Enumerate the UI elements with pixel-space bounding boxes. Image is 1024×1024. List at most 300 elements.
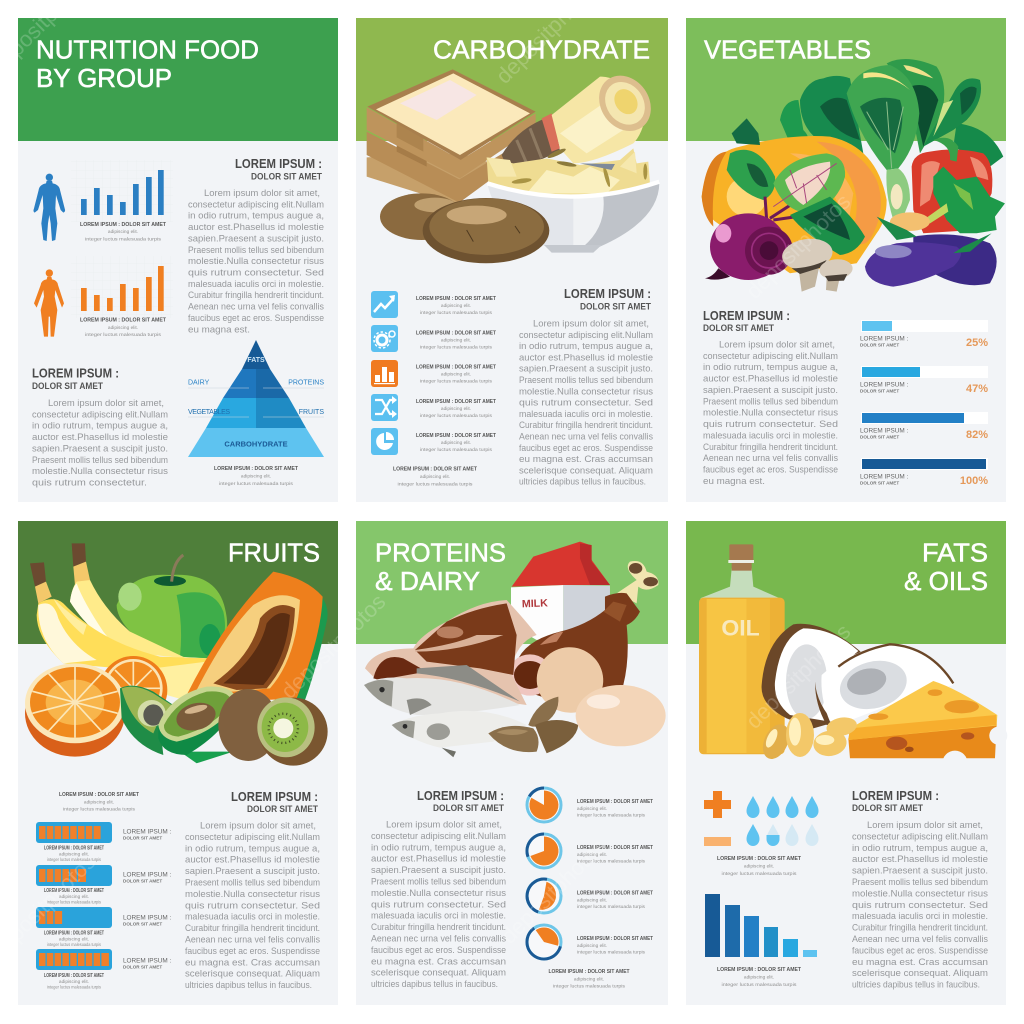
green floret — [923, 167, 1005, 233]
text block: vegetables: Praesent mollis tellus sed bibendum — [703, 395, 838, 406]
meter: row 2: LOREM IPSUM : — [123, 872, 172, 878]
text block: vegetables — [703, 338, 838, 486]
caption — [80, 318, 167, 338]
caption: integer luctus malesuada turpis — [85, 236, 162, 242]
header band: fats — [686, 521, 1006, 644]
header band: vegetables — [686, 18, 1006, 141]
captions: icon rows: integer luctus malesuada turpis — [420, 447, 493, 453]
heading: carbohydrate: LOREM IPSUM : — [564, 287, 651, 301]
captions: pie rows: LOREM IPSUM : DOLOR SIT AMET — [577, 799, 654, 805]
text block: fruits: Aenean nec urna vel felis convallis — [185, 934, 320, 944]
caption: pyramid: integer luctus malesuada turpis — [219, 481, 294, 487]
text block: fruits: in odio rutrum, tempus augue a, — [185, 842, 320, 853]
oil bottle: OIL — [721, 616, 760, 641]
caption: drops — [717, 856, 802, 877]
title: carbohydrate: CARBOHYDRATE — [433, 34, 650, 64]
text block: carbohydrate — [519, 318, 653, 487]
gauge: pie 3 — [527, 879, 561, 913]
text block: carbohydrate: Curabitur fringilla hendrerit tincidunt. — [519, 419, 653, 430]
icon: shuffle — [371, 394, 398, 421]
illustration: vegetables — [702, 59, 1005, 292]
icon: female figure — [34, 269, 64, 337]
milk carton: MILK — [522, 597, 548, 610]
text block: fats: malesuada iaculis orci in molestie. — [852, 910, 988, 921]
text block: proteins: Praesent mollis tellus sed bibendum — [371, 876, 506, 886]
meter: row 3: integer luctus malesuada turpis — [47, 942, 101, 948]
peanuts — [758, 713, 858, 763]
bar chart: descending — [705, 894, 817, 957]
text block: left column: Lorem ipsum dolor sit amet, — [48, 397, 164, 408]
header band: proteins — [356, 521, 668, 644]
icon: bar chart — [371, 360, 398, 387]
oil bottle — [699, 544, 785, 754]
caption — [80, 222, 167, 242]
heading: fruits: DOLOR SIT AMET — [247, 804, 318, 814]
illustration: bread, root, pasta, potatoes — [367, 66, 661, 263]
text block: carbohydrate: ultricies dapibus tellus in faucibus. — [519, 476, 646, 487]
captions: pie rows: adipiscing elit. — [577, 806, 607, 812]
text block: vegetables: Aenean nec urna vel felis convallis — [703, 452, 838, 463]
text block: vegetables: auctor est.Phasellus id molestie — [703, 373, 838, 384]
text block: carbohydrate: auctor est.Phasellus id molestie — [519, 351, 653, 362]
oranges — [25, 656, 167, 757]
watermark: depositphotos — [741, 189, 855, 304]
text block: carbohydrate: Lorem ipsum dolor sit amet, — [533, 318, 649, 328]
caption: pyramid: LOREM IPSUM : DOLOR SIT AMET — [214, 466, 299, 472]
header band: fruits — [18, 521, 338, 644]
text block: fats: eu magna est. Cras accumsan — [852, 956, 988, 967]
bread stack — [367, 69, 536, 204]
captions: pie rows: LOREM IPSUM : DOLOR SIT AMET — [577, 845, 654, 851]
captions: icon rows: adipiscing elit. — [420, 474, 450, 480]
heading: fruits — [231, 790, 318, 814]
panel: vegetables — [686, 18, 1006, 502]
text block: fats: consectetur adipiscing elit.Nullam — [852, 830, 988, 841]
icon: male figure — [33, 174, 65, 241]
leafy greens back — [780, 59, 1003, 167]
text block: left column: auctor est.Phasellus id molestie — [32, 431, 168, 442]
orange bars — [81, 266, 164, 311]
root vegetable — [502, 66, 661, 167]
beet leaves — [727, 118, 865, 255]
captions: icon rows: LOREM IPSUM : DOLOR SIT AMET — [416, 296, 497, 302]
text block: right column: in odio rutrum, tempus augue a, — [188, 210, 324, 221]
text block: fats: ultricies dapibus tellus in faucibus. — [852, 979, 980, 990]
title: fats and oils: FATS — [922, 538, 988, 568]
text block: fruits: Curabitur fringilla hendrerit tincidunt. — [185, 922, 320, 933]
meter: row 4: DOLOR SIT AMET — [123, 964, 162, 970]
text block: right column: Curabitur fringilla hendrerit tincidunt. — [188, 289, 324, 300]
meter: row 1: LOREM IPSUM : DOLOR SIT AMET — [44, 846, 105, 852]
panel: nutrition food by group — [18, 18, 338, 502]
panel: fats and oils — [686, 521, 1007, 1005]
caption: drops: LOREM IPSUM : DOLOR SIT AMET — [717, 856, 802, 862]
captions: icon rows: adipiscing elit. — [441, 303, 471, 309]
bar: 47%: LOREM IPSUM : — [860, 382, 909, 388]
text block: vegetables: in odio rutrum, tempus augue a, — [703, 361, 838, 372]
chart: food pyramid: CARBOHYDRATE — [224, 440, 288, 448]
watermark: depositphotos — [276, 589, 390, 704]
chart: female body with orange bars — [34, 256, 173, 338]
caption: drops: integer luctus malesuada turpis — [722, 871, 797, 877]
text block: carbohydrate: consectetur adipiscing elit.Nullam — [519, 329, 653, 340]
heading: left column: LOREM IPSUM : — [32, 366, 119, 380]
text block: proteins: ultricies dapibus tellus in faucibus. — [371, 978, 498, 989]
pumpkin — [702, 136, 887, 273]
title: proteins and dairy: PROTEINS — [375, 538, 506, 568]
caption: LOREM IPSUM : DOLOR SIT AMET — [80, 222, 167, 228]
title: fats and oils — [904, 538, 988, 596]
panel: proteins and dairy — [356, 521, 668, 1005]
meter: row 4 — [36, 949, 172, 990]
heading: carbohydrate — [564, 287, 651, 312]
chicken leg — [508, 561, 658, 698]
bar: 82%: LOREM IPSUM : — [860, 428, 909, 434]
watermark: depositphotos — [496, 834, 610, 949]
papaya — [187, 572, 328, 702]
meter: row 4: LOREM IPSUM : — [123, 958, 172, 964]
meter: row 1: integer luctus malesuada turpis — [47, 857, 101, 863]
text block: proteins: Lorem ipsum dolor sit amet, — [386, 818, 502, 830]
captions: pie rows: adipiscing elit. — [577, 852, 607, 858]
bar: 47%: DOLOR SIT AMET — [860, 388, 899, 394]
heading: vegetables: DOLOR SIT AMET — [703, 323, 774, 333]
text block: vegetables: malesuada iaculis orci in molestie. — [703, 429, 838, 440]
text block: left column: molestie.Nulla consectetur risus — [32, 465, 168, 476]
bar: 100%: LOREM IPSUM : — [860, 474, 909, 480]
heading: fruits: LOREM IPSUM : — [231, 790, 318, 804]
icon: plus — [704, 791, 731, 818]
text block: vegetables: molestie.Nulla consectetur risus — [703, 407, 838, 418]
clams — [488, 697, 578, 753]
captions: icon rows: LOREM IPSUM : DOLOR SIT AMET — [393, 466, 478, 472]
text block: left column: in odio rutrum, tempus augue a, — [32, 420, 168, 431]
kiwis — [218, 689, 328, 766]
header band: carbohydrate — [356, 18, 668, 141]
text block: right column: quis rutrum consectetur. Sed — [188, 266, 324, 278]
heading: right column — [235, 157, 322, 182]
text block: right column: molestie.Nulla consectetur risus — [188, 255, 324, 266]
text block: left column: quis rutrum consectetur. — [32, 476, 147, 488]
captions: icon rows: LOREM IPSUM : DOLOR SIT AMET — [416, 365, 497, 371]
text block: proteins — [371, 818, 506, 989]
captions: icon rows: adipiscing elit. — [441, 440, 471, 446]
bar: 47% — [860, 366, 988, 395]
avocados — [120, 686, 237, 763]
title: vegetables: VEGETABLES — [704, 34, 871, 64]
chart: food pyramid: FATS — [247, 357, 265, 364]
captions: pie rows — [548, 799, 654, 990]
caption: integer luctus malesuada turpis — [85, 332, 162, 338]
bar: 100%: DOLOR SIT AMET — [860, 480, 899, 486]
text block: carbohydrate: molestie.Nulla consectetur risus — [519, 385, 653, 396]
text block: proteins: Aenean nec urna vel felis convallis — [371, 932, 506, 944]
captions: icon rows: integer luctus malesuada turpis — [420, 344, 493, 350]
text block: proteins: eu magna est. Cras accumsan — [371, 955, 506, 966]
caption: bars — [717, 967, 802, 988]
text block: fruits: eu magna est. Cras accumsan — [185, 956, 320, 967]
panel: carbohydrate — [356, 18, 668, 502]
bar: 100% — [860, 458, 988, 487]
text block: fats: molestie.Nulla consectetur risus — [852, 887, 988, 898]
captions: pie rows: adipiscing elit. — [574, 976, 604, 982]
text block: fats: Aenean nec urna vel felis convallis — [852, 933, 988, 944]
heading: proteins: LOREM IPSUM : — [417, 789, 504, 803]
beetroot — [705, 213, 793, 280]
caption: adipiscing elit. — [108, 325, 138, 331]
caption: bars: adipiscing elit. — [744, 974, 774, 980]
captions: pie rows: adipiscing elit. — [577, 943, 607, 949]
fish — [364, 665, 527, 757]
captions: pie rows: adipiscing elit. — [577, 898, 607, 904]
text block: right column: faucibus eget ac eros. Suspendisse — [188, 312, 324, 323]
cheese wedge — [848, 681, 1007, 776]
title: proteins and dairy: & DAIRY — [375, 566, 480, 596]
text block: right column — [188, 187, 324, 334]
meter: row 4: LOREM IPSUM : DOLOR SIT AMET — [44, 973, 105, 979]
bar: 25%: DOLOR SIT AMET — [860, 342, 899, 348]
captions: icon rows: LOREM IPSUM : DOLOR SIT AMET — [416, 330, 497, 336]
text block: proteins: faucibus eget ac eros. Suspendisse — [371, 944, 506, 955]
bar: 47%: 47% — [966, 383, 988, 395]
apple — [117, 555, 227, 658]
icon: minus — [704, 837, 731, 846]
bar: 25%: 25% — [966, 337, 988, 349]
text block: fats: Praesent mollis tellus sed bibendum — [852, 876, 988, 887]
meter: row 3: LOREM IPSUM : — [123, 914, 172, 922]
text block: right column: eu magna est. — [188, 323, 250, 334]
text block: fruits: quis rutrum consectetur. Sed — [185, 899, 320, 910]
blue bars — [81, 170, 164, 215]
captions: icon rows — [393, 296, 497, 488]
text block: carbohydrate: Praesent mollis tellus sed bibendum — [519, 374, 653, 385]
captions: pie rows: integer luctus malesuada turpis — [577, 858, 646, 864]
text block: carbohydrate: quis rutrum consectetur. Sed — [519, 397, 653, 408]
captions: icon rows: integer luctus malesuada turpis — [420, 310, 493, 316]
text block: fruits: auctor est.Phasellus id molestie — [185, 854, 320, 865]
bar: 25%: LOREM IPSUM : — [860, 336, 909, 342]
text block: proteins: consectetur adipiscing elit.Nullam — [371, 830, 506, 841]
icon tiles — [371, 291, 398, 455]
water drops — [746, 796, 818, 846]
caption: fruits top: adipiscing elit. — [84, 800, 114, 806]
chart: food pyramid: VEGETABLES — [188, 409, 230, 416]
caption: bars: LOREM IPSUM : DOLOR SIT AMET — [717, 967, 802, 973]
text block: vegetables: quis rutrum consectetur. Sed — [703, 418, 838, 429]
text block: vegetables: eu magna est. — [703, 475, 765, 486]
text block: carbohydrate: scelerisque consequat. Aliquam — [519, 464, 653, 475]
gauge: pie 1 — [527, 788, 561, 822]
text block: carbohydrate: sapien.Praesent a suscipit justo. — [519, 363, 653, 374]
watermark — [0, 0, 855, 964]
progress bars — [860, 320, 988, 487]
text block: right column: auctor est.Phasellus id molestie — [188, 221, 324, 232]
captions: icon rows: LOREM IPSUM : DOLOR SIT AMET — [416, 433, 497, 439]
title: nutrition food by group — [36, 34, 259, 93]
text block: fruits: consectetur adipiscing elit.Nullam — [185, 831, 320, 842]
caption: fruits top — [59, 792, 140, 812]
meter: row 2: integer luctus malesuada turpis — [47, 900, 101, 906]
meter: row 1: adipiscing elit. — [59, 852, 89, 858]
text block: fats: Lorem ipsum dolor sit amet, — [867, 819, 983, 830]
meter: row 3 — [36, 907, 172, 948]
bar: 100%: 100% — [960, 475, 988, 487]
captions: icon rows: adipiscing elit. — [441, 337, 471, 343]
text block: fruits: faucibus eget ac eros. Suspendisse — [185, 945, 320, 956]
text block: fats: auctor est.Phasellus id molestie — [852, 853, 988, 864]
title: fats and oils: & OILS — [904, 566, 988, 596]
captions: icon rows: integer luctus malesuada turpis — [420, 379, 493, 385]
illustration: fruits — [25, 543, 328, 766]
text block: carbohydrate: in odio rutrum, tempus augue a, — [519, 340, 653, 351]
text block: fats: scelerisque consequat. Aliquam — [852, 967, 988, 978]
egg — [576, 685, 666, 746]
text block: left column: consectetur adipiscing elit.Nullam — [32, 408, 168, 419]
caption: LOREM IPSUM : DOLOR SIT AMET — [80, 318, 167, 324]
text block: proteins: sapien.Praesent a suscipit justo. — [371, 864, 506, 875]
illustration: fats and oils — [699, 544, 1007, 776]
heading: vegetables: LOREM IPSUM : — [703, 309, 790, 323]
text block: proteins: Curabitur fringilla hendrerit tincidunt. — [371, 921, 506, 932]
meter: row 2: LOREM IPSUM : DOLOR SIT AMET — [44, 888, 105, 894]
heading: right column: DOLOR SIT AMET — [251, 172, 322, 182]
meter: row 1: LOREM IPSUM : — [123, 828, 172, 836]
icon: trend arrow — [371, 291, 398, 318]
meter: row 2: adipiscing elit. — [59, 894, 89, 900]
text block: fats: sapien.Praesent a suscipit justo. — [852, 865, 988, 876]
panel: fruits — [18, 521, 338, 1005]
text block: right column: consectetur adipiscing elit.Nullam — [188, 198, 324, 209]
text block: proteins: scelerisque consequat. Aliquam — [371, 967, 506, 978]
text block: right column: Aenean nec urna vel felis convallis — [188, 301, 324, 312]
header band: nutrition — [18, 18, 338, 141]
caption: pyramid — [214, 466, 299, 487]
text block: fruits: sapien.Praesent a suscipit justo. — [185, 865, 320, 876]
text block: right column: Lorem ipsum dolor sit amet, — [204, 187, 320, 198]
gauge: pie 4 — [527, 925, 561, 959]
captions: pie rows: integer luctus malesuada turpis — [553, 984, 626, 990]
heading: fats: LOREM IPSUM : — [852, 789, 939, 803]
bananas — [30, 543, 210, 702]
text block: right column: Praesent mollis tellus sed bibendum — [188, 244, 324, 255]
caption: adipiscing elit. — [108, 229, 138, 235]
heading: fats: DOLOR SIT AMET — [852, 803, 923, 813]
meter: row 4: adipiscing elit. — [59, 979, 89, 985]
chart: food pyramid: FRUITS — [299, 409, 324, 416]
icon: gears — [371, 325, 398, 352]
text block: carbohydrate: faucibus eget ac eros. Suspendisse — [519, 442, 653, 453]
pasta bowl — [487, 147, 659, 253]
bok choy — [847, 65, 919, 220]
gauge: pie 2 — [527, 834, 561, 868]
caption: fruits top: integer luctus malesuada turpis — [63, 806, 136, 812]
bar: 82% — [860, 412, 988, 441]
text block: carbohydrate: eu magna est. Cras accumsan — [519, 453, 653, 464]
text block: fats: in odio rutrum, tempus augue a, — [852, 842, 988, 853]
text block: left column: Praesent mollis tellus sed bibendum — [32, 454, 168, 465]
text block: proteins: auctor est.Phasellus id molestie — [371, 853, 506, 864]
title: nutrition food by group: BY GROUP — [36, 63, 172, 93]
text block: carbohydrate: malesuada iaculis orci in molestie. — [519, 408, 653, 419]
captions: pie rows: integer luctus malesuada turpis — [577, 904, 646, 910]
text block: fruits: molestie.Nulla consectetur risus — [185, 888, 320, 899]
milk carton — [511, 542, 610, 640]
text block: vegetables: faucibus eget ac eros. Suspendisse — [703, 464, 838, 474]
meter: row 1: DOLOR SIT AMET — [123, 836, 162, 840]
heading: carbohydrate: DOLOR SIT AMET — [580, 302, 651, 312]
bar: 82%: DOLOR SIT AMET — [860, 434, 899, 440]
heading: right column: LOREM IPSUM : — [235, 157, 322, 171]
heading: fats — [852, 789, 939, 813]
icon: pie — [371, 428, 398, 455]
captions: pie rows: integer luctus malesuada turpis — [577, 950, 646, 956]
heading: vegetables — [703, 309, 790, 333]
text block: right column: malesuada iaculis orci in molestie. — [188, 278, 324, 289]
text block: vegetables: Lorem ipsum dolor sit amet, — [719, 338, 835, 350]
captions: icon rows: integer luctus malesuada turpis — [398, 482, 473, 488]
text block: proteins: molestie.Nulla consectetur risus — [371, 887, 506, 898]
meter: row 2: DOLOR SIT AMET — [123, 878, 162, 884]
text block: vegetables: consectetur adipiscing elit.Nullam — [703, 350, 838, 361]
caption: drops: adipiscing elit. — [744, 864, 774, 870]
eggplants — [865, 212, 997, 287]
text block: fruits: Praesent mollis tellus sed bibendum — [185, 876, 320, 888]
captions: icon rows: LOREM IPSUM : DOLOR SIT AMET — [416, 399, 497, 405]
chart: food pyramid: PROTEINS — [288, 380, 324, 386]
coconut halves — [762, 624, 953, 728]
text block: fats: Curabitur fringilla hendrerit tincidunt. — [852, 922, 988, 933]
heading: left column — [32, 366, 119, 391]
text block: fruits: ultricies dapibus tellus in faucibus. — [185, 979, 312, 990]
text block: fruits — [185, 820, 320, 990]
meter: row 3: DOLOR SIT AMET — [123, 922, 162, 926]
egg — [527, 638, 612, 722]
illustration: proteins — [364, 542, 666, 757]
chart: food pyramid: DAIRY — [188, 380, 210, 386]
text block: fats — [852, 819, 988, 990]
heading: left column: DOLOR SIT AMET — [32, 381, 103, 391]
meter: row 2 — [36, 865, 172, 906]
captions: icon rows: adipiscing elit. — [441, 372, 471, 378]
text block: proteins: in odio rutrum, tempus augue a, — [371, 841, 506, 852]
text block: proteins: malesuada iaculis orci in molestie. — [371, 910, 506, 921]
text block: fruits: scelerisque consequat. Aliquam — [185, 968, 320, 979]
captions: icon rows: adipiscing elit. — [441, 406, 471, 412]
text block: fruits: Lorem ipsum dolor sit amet, — [200, 820, 316, 830]
text block: carbohydrate: Aenean nec urna vel felis convallis — [519, 430, 653, 442]
caption: pyramid: adipiscing elit. — [241, 474, 271, 480]
text block: left column: sapien.Praesent a suscipit justo. — [32, 442, 168, 453]
meter: row 1 — [36, 822, 172, 863]
title: fruits: FRUITS — [228, 538, 320, 568]
captions: pie rows: LOREM IPSUM : DOLOR SIT AMET — [577, 890, 654, 896]
text block: fruits: malesuada iaculis orci in molestie. — [185, 911, 320, 922]
pie gauges — [527, 788, 561, 959]
potatoes — [380, 193, 549, 263]
text block: proteins: quis rutrum consectetur. Sed — [371, 898, 506, 909]
red pepper — [912, 138, 992, 233]
title: nutrition food by group: NUTRITION FOOD — [36, 34, 259, 64]
title: proteins and dairy — [375, 538, 506, 596]
text block: fats: quis rutrum consectetur. Sed — [852, 899, 988, 910]
mushrooms — [780, 236, 853, 292]
meter: row 4: integer luctus malesuada turpis — [47, 984, 101, 990]
text block: left column — [32, 397, 168, 488]
heading: proteins: DOLOR SIT AMET — [433, 803, 504, 813]
text block: fats: faucibus eget ac eros. Suspendisse — [852, 944, 988, 955]
captions: pie rows: integer luctus malesuada turpis — [577, 812, 646, 818]
meter: row 3: adipiscing elit. — [59, 936, 89, 942]
